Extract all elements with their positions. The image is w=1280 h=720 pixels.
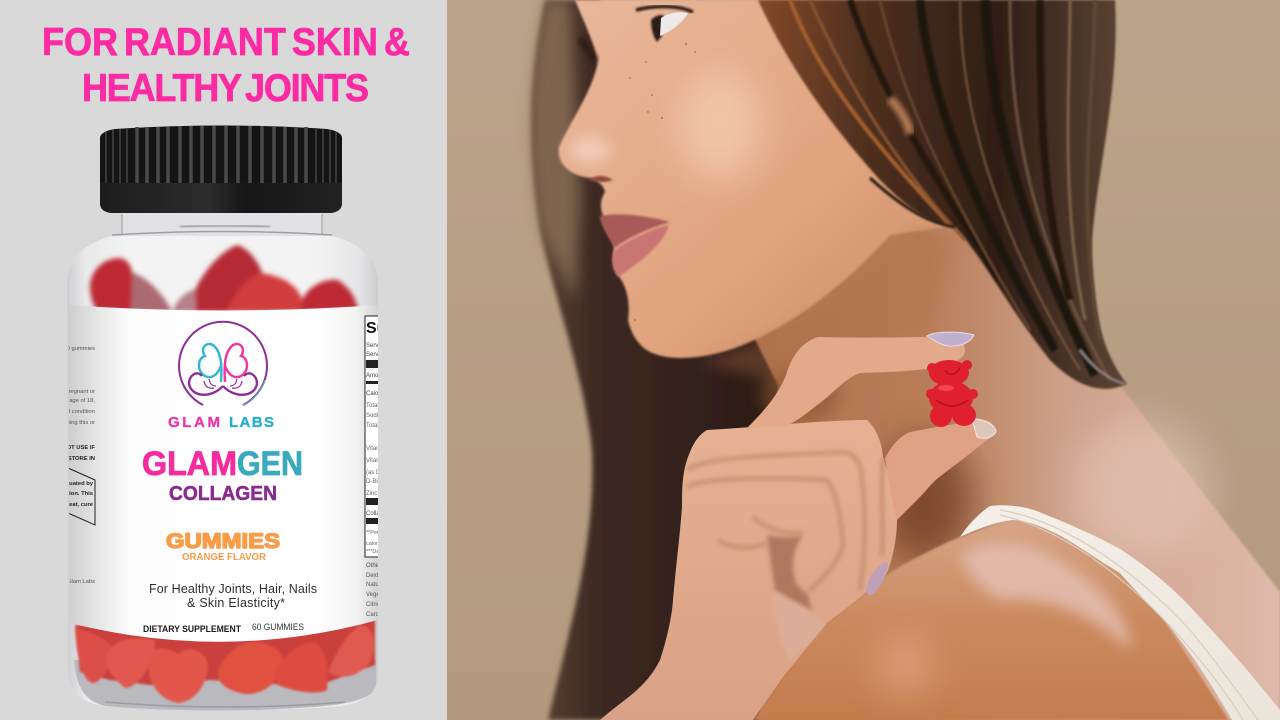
arm and shoulder [753,518,1229,720]
hair light patch [890,98,910,134]
supplement facts panel: Total Su [366,423,388,429]
supplement facts panel: Zinc (a [366,491,385,497]
left side panel text: uming this or [62,420,95,426]
nostril [588,176,613,182]
cheek highlight [678,70,762,180]
supplement facts panel: Vitamin [366,446,386,452]
brand name [168,414,274,431]
supplement facts panel [364,316,378,616]
neck side shade [760,365,840,425]
left side panel text: by Glam Labs [59,579,95,585]
supplement facts panel: **Perc [366,530,382,536]
supplement note: DIETARY SUPPLEMENT [143,624,241,635]
photo: woman holding gummy bear [447,0,1280,720]
front hair [758,0,1127,389]
inner palm [772,592,824,662]
lavender nails [927,332,974,346]
left side panel text: is Pregnant or [59,389,95,395]
back hair [531,0,790,720]
nose highlight [570,136,610,164]
left panel background [0,0,447,720]
supplement facts panel: Vegetabl [366,592,389,598]
left side panel text: SING. STORE IN [50,456,95,462]
supplement facts panel: Vitamin [366,458,386,464]
face [559,0,960,358]
cap [100,126,342,213]
studio backdrop [447,0,1280,720]
left side panel text [68,346,96,583]
lips [600,214,670,277]
left side panel text: ical condition [61,409,95,415]
bottle neck [122,212,322,238]
logo: butterfly in circle [179,322,267,405]
supplement facts panel: Carotene [366,612,391,618]
bottle glass body [67,236,378,710]
finger creases [687,452,883,592]
hand [600,332,996,720]
left side panel text: DO NOT USE IF [52,445,95,451]
supplement facts panel: Collage [366,511,387,517]
supplement facts panel: Amount [366,373,387,379]
supplement facts panel: Serving [366,352,386,358]
upper hair glow [531,0,580,300]
product name: GEN [237,445,303,483]
gummies label: GUMMIES [166,530,280,553]
left side panel text: tration. This [60,491,93,497]
supplement facts panel: D-Biotin [366,479,387,485]
left side panel text: se, treat, cure [55,502,94,508]
supplement facts panel: Sup [366,320,396,337]
neck highlight [1070,420,1210,560]
wrist and fist [600,420,897,720]
neck shadow [877,438,973,562]
hair strands [790,0,1125,384]
supplement facts panel: (as D [366,470,381,476]
supplement facts panel: Sodium [366,413,386,419]
jar rim shadow [112,232,332,235]
supplement facts panel: calorie [366,541,382,547]
cap ribs [106,126,336,183]
product name: GLAM [142,445,237,483]
left side panel text: valuated by [61,481,94,487]
supplement facts panel: Dextrose [366,573,391,579]
supplement facts panel: Natural [366,582,385,588]
cap band [100,183,342,213]
gap between fingers [767,535,812,612]
supplement facts panel: Citric Tr [366,602,387,608]
supplement facts panel: Calories [366,391,388,397]
base of jar [74,660,376,711]
jaw shade [706,340,776,385]
product name [142,445,303,483]
product bottle [67,126,378,710]
index finger [747,336,965,428]
product label [68,306,378,642]
benefit statement: & Skin Elasticity* [187,596,285,610]
title: FOR RADIANT SKIN & [42,20,410,63]
brand name: GLAM [168,414,220,431]
supplement facts panel: Serving [366,343,386,349]
count: 60 GUMMIES [252,622,304,633]
collagen subtitle: COLLAGEN [169,483,277,505]
shoulder highlight [960,542,1131,650]
left side panel text: the age of 18, [60,398,95,404]
brand name: LABS [229,414,274,431]
supplement facts panel: Total Ca [366,403,389,409]
supplement facts panel: ***Dai [366,549,381,555]
supplement facts panel: Other [366,563,381,569]
gummies inside jar [74,245,376,711]
freckles [629,43,696,321]
title [42,20,410,109]
thumb [885,420,994,520]
benefit statement [149,582,317,610]
gummy bear [926,360,978,427]
title: HEALTHY JOINTS [82,66,369,109]
benefit statement: For Healthy Joints, Hair, Nails [149,582,317,596]
bottom gummy backing [75,615,375,685]
neck and torso [735,195,1280,720]
arm highlight [877,635,933,695]
left side panel text: 60 gummies [63,346,95,352]
eye [580,6,693,62]
flavor: ORANGE FLAVOR [182,552,267,563]
strap [960,505,1280,720]
